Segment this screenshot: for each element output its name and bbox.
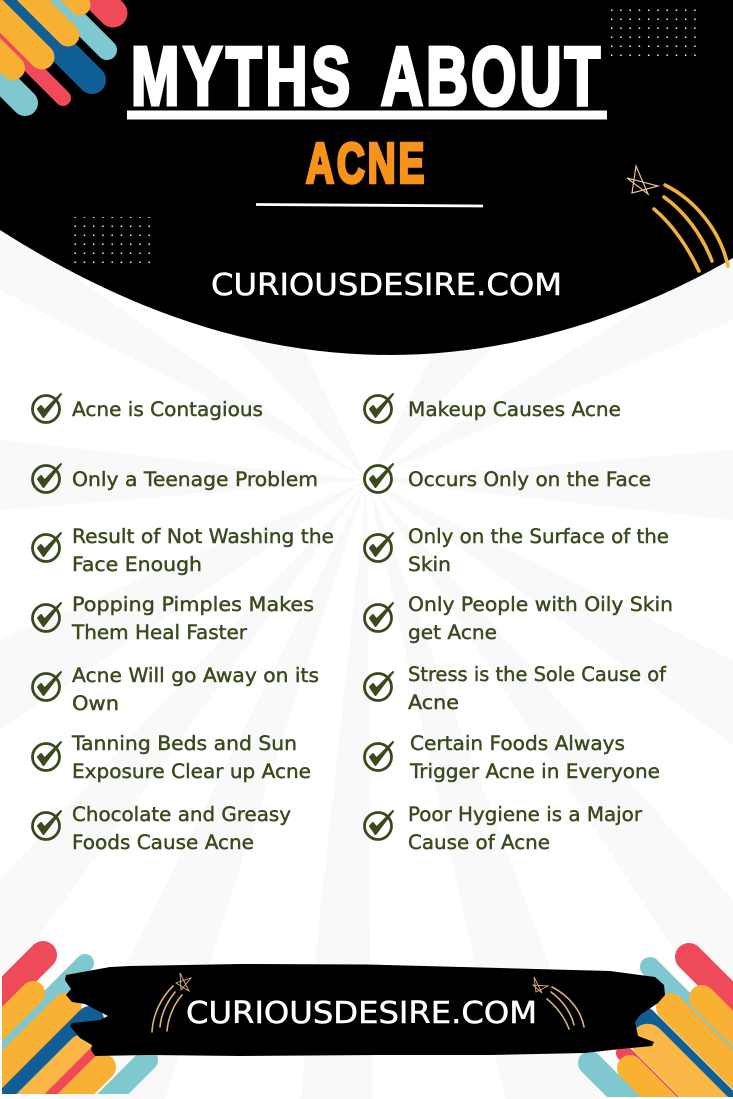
myth: not washing: Result of Not Washing the (72, 525, 334, 548)
title underline (127, 110, 607, 120)
myth: go away on its own (32, 664, 319, 715)
myth: stress: Stress is the Sole Cause of (408, 663, 667, 686)
myth list right column (364, 394, 673, 854)
top-left colourful stripes (0, 0, 113, 103)
website url in header: CURIOUSDESIRE.COM (211, 268, 562, 303)
myth: oily skin: Only People with Oily Skin (408, 593, 673, 616)
subtitle: acne: ACNE (306, 132, 424, 195)
myth: tanning: Tanning Beds and Sun (71, 732, 297, 755)
title: myths about (131, 30, 600, 123)
myth: makeup: Makeup Causes Acne (408, 398, 621, 421)
myth: popping pimples: Them Heal Faster (71, 621, 248, 644)
myth: certain foods: Trigger Acne in Everyone (409, 760, 660, 783)
myth: go away on its own: Acne Will go Away on its (72, 664, 319, 687)
myth: chocolate (32, 803, 291, 854)
myth: makeup (364, 394, 621, 422)
background sunburst rays (0, 225, 733, 1099)
myth: tanning: Exposure Clear up Acne (72, 760, 311, 783)
myth: chocolate: Chocolate and Greasy (72, 803, 291, 826)
dot grid top right (608, 9, 701, 63)
myth: teenage problem: Only a Teenage Problem (72, 468, 318, 491)
myth: surface of skin (364, 525, 669, 576)
myth: chocolate: Foods Cause Acne (72, 831, 254, 854)
myth: not washing (32, 525, 334, 576)
icon: shooting star banner left (152, 973, 191, 1032)
dot grid left (72, 217, 156, 263)
myth: oily skin: get Acne (408, 621, 497, 644)
myth: surface of skin: Skin (408, 553, 451, 576)
myth: popping pimples (32, 593, 314, 644)
myth: poor hygiene: Cause of Acne (408, 831, 550, 854)
myth: popping pimples: Popping Pimples Makes (72, 593, 314, 616)
icon: shooting star banner right (533, 977, 584, 1029)
bottom-left colourful stripes (2, 941, 158, 1094)
myth: poor hygiene: Poor Hygiene is a Major (408, 803, 643, 826)
myth: only on the face (364, 464, 651, 492)
myth: certain foods (364, 732, 660, 783)
black curved header panel (0, 0, 733, 355)
myth: oily skin (364, 593, 673, 644)
myth: surface of skin: Only on the Surface of the (408, 525, 669, 548)
myth: acne is contagious: Acne is Contagious (72, 398, 263, 421)
myth list left column (32, 394, 334, 854)
myth: teenage problem (32, 464, 318, 492)
myth: certain foods: Certain Foods Always (410, 732, 625, 755)
myth: tanning (32, 732, 311, 783)
myth: stress (364, 663, 667, 714)
myth: acne is contagious (32, 394, 263, 422)
myth: only on the face: Occurs Only on the Face (408, 468, 651, 491)
icon: shooting star top right (627, 166, 728, 271)
myth: stress: Acne (408, 691, 459, 714)
myth: not washing: Face Enough (72, 553, 202, 576)
website url in banner: CURIOUSDESIRE.COM (186, 996, 537, 1031)
title: myths about: ABOUT (381, 30, 600, 123)
myth: poor hygiene (364, 803, 643, 854)
bottom-right colourful stripes (578, 943, 733, 1097)
subtitle underline (256, 204, 483, 206)
title: myths about: MYTHS (131, 30, 350, 123)
myth: go away on its own: Own (72, 692, 119, 715)
black brush banner (65, 964, 665, 1056)
